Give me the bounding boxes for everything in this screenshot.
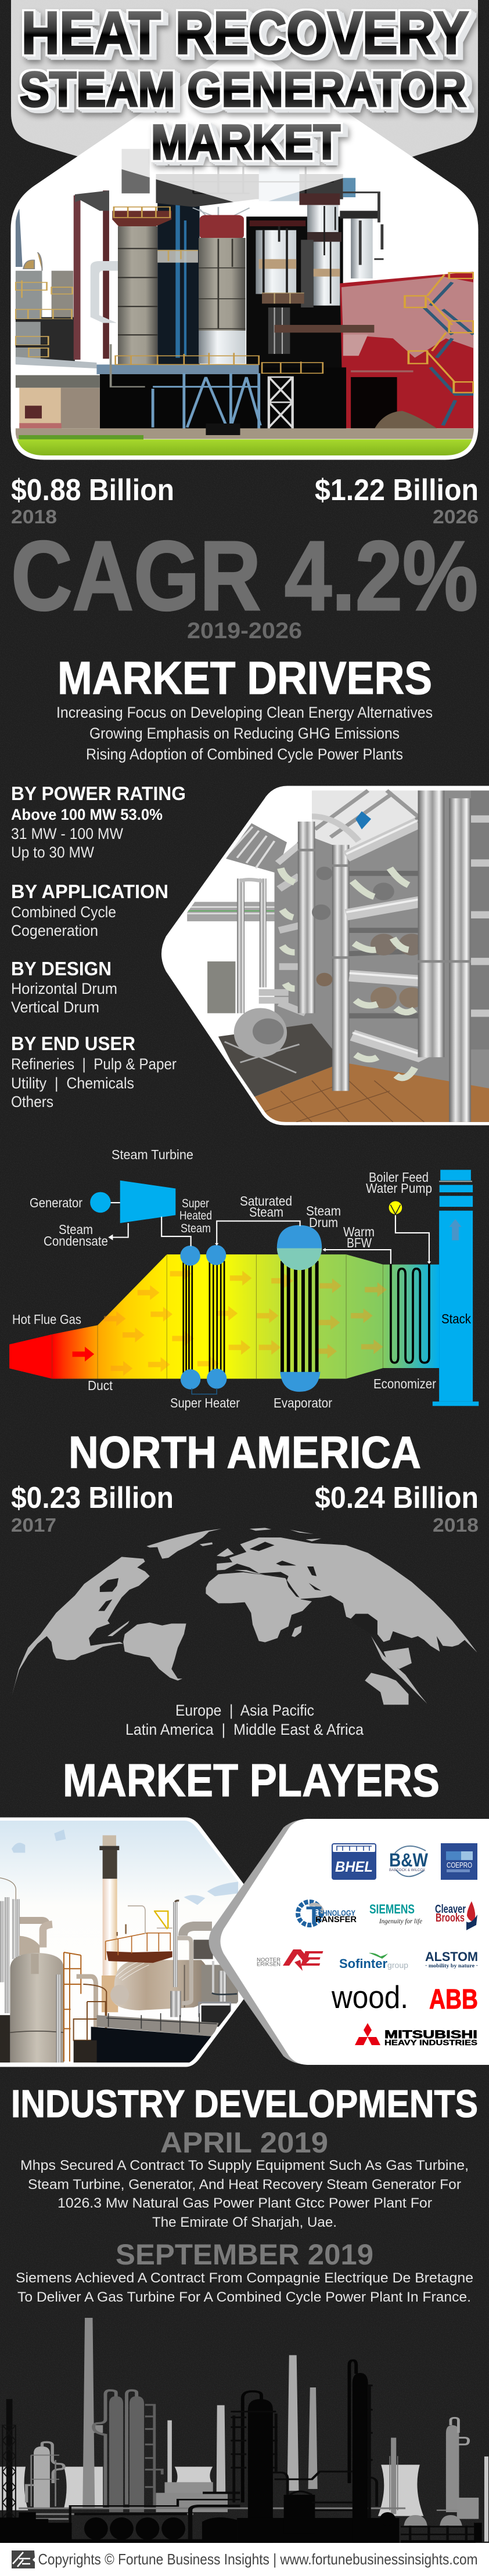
photo: power plant in hexagonal frame <box>13 45 476 458</box>
heading: market players: MARKET PLAYERS <box>63 1754 440 1806</box>
diagram labels: Saturated <box>240 1193 292 1209</box>
diagram labels: Condensate <box>44 1233 108 1249</box>
diagram: heat recovery steam generator <box>9 1147 479 1410</box>
diagram labels: Hot Flue Gas <box>12 1312 81 1327</box>
diagram labels: Warm <box>343 1224 375 1239</box>
boiler feed water pump <box>389 1201 402 1214</box>
logo: Babcock & Wilcox: B&W <box>389 1850 429 1871</box>
logo: COEPRO: COEPRO <box>447 1861 472 1869</box>
logo: BHEL: BHEL <box>335 1859 373 1875</box>
segment: by power rating: Up to 30 MW <box>11 844 94 861</box>
diagram labels: Steam Turbine <box>112 1147 193 1162</box>
heading: market drivers: MARKET DRIVERS <box>57 652 432 704</box>
logo: Technology Transfer: RANSFER <box>315 1915 357 1924</box>
icon: Fortune Business Insights logo <box>12 2550 35 2568</box>
segment: by design: Vertical Drum <box>11 998 99 1016</box>
development: September 2019: SEPTEMBER 2019 <box>116 2238 373 2271</box>
development: April 2019: APRIL 2019 <box>160 2126 328 2159</box>
market drivers list: Growing Emphasis on Reducing GHG Emissions <box>89 725 400 742</box>
diagram labels: Steam <box>181 1222 211 1235</box>
logo: Siemens: Ingenuity for life <box>379 1917 423 1925</box>
logo: Sofinter group: Sofinter <box>339 1956 387 1971</box>
stat: north america 2018: $0.24 Billion <box>315 1481 479 1515</box>
heading: north america: NORTH AMERICA <box>69 1427 421 1478</box>
logo: Babcock & Wilcox <box>389 1846 429 1876</box>
segment: by power rating: 31 MW - 100 MW <box>11 825 123 842</box>
logo: Technology Transfer: T <box>306 1901 322 1930</box>
logo: Mitsubishi Heavy Industries: HEAVY INDUSTRIES <box>384 2038 477 2047</box>
right pipework <box>173 1902 178 1987</box>
horizontal tank <box>112 1960 211 2010</box>
diagram labels: Steam <box>59 1222 93 1237</box>
stat: CAGR: 2019-2026 <box>187 618 302 643</box>
deck and lower structure <box>97 2015 219 2036</box>
segment: by design: BY DESIGN <box>11 958 112 979</box>
market drivers list <box>56 704 433 763</box>
other regions list: Europe | Asia Pacific <box>175 1702 314 1719</box>
stat: 2018 market value <box>11 473 174 527</box>
diagram labels: Steam <box>249 1204 283 1220</box>
stat: north america 2017 <box>11 1481 174 1536</box>
logo: Technology Transfer <box>298 1901 357 1930</box>
stat: 2018 market value: 2018 <box>11 506 57 527</box>
diagram labels: Evaporator <box>274 1395 332 1410</box>
segment: by end user: Others <box>11 1093 53 1110</box>
logo: Sofinter group: group <box>387 1960 408 1970</box>
diagram labels: Drum <box>309 1215 338 1230</box>
diagram labels: Stack <box>441 1311 471 1326</box>
logo: Siemens <box>369 1902 423 1925</box>
logo: Nooter Eriksen: ERIKSEN <box>257 1961 281 1968</box>
logo: Mitsubishi Heavy Industries: MITSUBISHI <box>384 2029 477 2041</box>
development: April 2019: The Emirate Of Sharjah, Uae. <box>152 2215 337 2230</box>
market drivers list: Rising Adoption of Combined Cycle Power Plants <box>86 746 403 763</box>
segment: by power rating: BY POWER RATING <box>11 783 186 804</box>
logo: Alstom: ALSTOM <box>425 1949 478 1964</box>
photo: refinery in frame <box>0 1819 285 2067</box>
platform <box>106 1951 172 1963</box>
left pipes <box>0 1878 16 1901</box>
diagram labels: Generator <box>30 1195 82 1210</box>
logo: Technology Transfer: ECHNOLOGY <box>314 1908 356 1917</box>
diagram labels: Duct <box>88 1378 113 1393</box>
logo: Alstom: · mobility by nature · <box>425 1963 478 1969</box>
segment: by application: Combined Cycle <box>11 903 116 921</box>
vertical tank <box>10 1953 64 2063</box>
globe map <box>12 1528 477 1705</box>
logo: Wood: wood. <box>331 1979 408 2015</box>
evaporator tubes <box>282 1261 317 1373</box>
footer <box>0 2543 489 2576</box>
development: April 2019: 1026.3 Mw Natural Gas Power Plant Gtcc Power Plant For <box>57 2195 432 2211</box>
stat: 2026 market value: 2026 <box>433 506 479 527</box>
diagram labels: Super Heater <box>170 1395 240 1410</box>
diagram labels: BFW <box>347 1235 372 1250</box>
segment: by power rating: Above 100 MW 53.0% <box>11 806 163 823</box>
logo: Nooter Eriksen <box>257 1947 323 1971</box>
other regions list <box>125 1702 364 1738</box>
diagram labels: Water Pump <box>366 1181 432 1196</box>
segment: by design <box>11 958 117 1016</box>
drums and headers <box>180 1245 320 1392</box>
stat: 2026 market value: $1.22 Billion <box>315 473 479 507</box>
other regions list: Latin America | Middle East & Africa <box>125 1721 364 1738</box>
diagram labels: Steam <box>306 1203 341 1218</box>
title <box>20 0 469 169</box>
stack <box>433 1170 479 1406</box>
diagram labels <box>12 1147 471 1410</box>
market drivers list: Increasing Focus on Developing Clean Energy Alternatives <box>56 704 433 721</box>
logo: Nooter Eriksen: NOOTER <box>257 1957 281 1963</box>
logo: BHEL <box>332 1843 376 1880</box>
logo: Cleaver Brooks <box>435 1901 477 1930</box>
stat: north america 2017: $0.23 Billion <box>11 1481 174 1515</box>
segment: by application: Cogeneration <box>11 922 98 939</box>
stat: 2018 market value: $0.88 Billion <box>11 473 174 507</box>
skyline illustration <box>0 2318 488 2543</box>
development: September 2019 <box>16 2238 473 2305</box>
logo: Cleaver Brooks: Brooks <box>436 1912 465 1924</box>
development: April 2019 <box>20 2126 469 2230</box>
panel: company logos <box>209 1819 489 2065</box>
diagram labels: Boiler Feed <box>369 1170 429 1185</box>
economizer coil <box>391 1262 429 1363</box>
development: September 2019: To Deliver A Gas Turbine For A Combined Cycle Power Plant In France. <box>17 2289 471 2305</box>
segment: by application <box>11 881 168 939</box>
segment: by end user: BY END USER <box>11 1033 135 1054</box>
segment: by end user <box>11 1033 177 1110</box>
segment: by power rating <box>11 783 186 861</box>
logo: ABB: ABB <box>429 1984 478 2015</box>
photo: stainless pipework in hexagonal frame <box>163 787 489 1124</box>
header panel <box>11 0 478 205</box>
development: September 2019: Siemens Achieved A Contract From Compagnie Electrique De Bretagne <box>16 2270 473 2286</box>
diagram labels: Super <box>182 1197 209 1210</box>
segment: by application: BY APPLICATION <box>11 881 168 902</box>
segment: by design: Horizontal Drum <box>11 980 117 997</box>
chimney <box>103 1835 116 1847</box>
segment: by end user: Refineries | Pulp & Paper <box>11 1055 177 1073</box>
diagram labels: Economizer <box>373 1376 436 1391</box>
logo: Sofinter group <box>339 1953 408 1971</box>
turbine and generator <box>120 1181 175 1223</box>
logo: Babcock & Wilcox: BABCOCK & WILCOX <box>389 1869 425 1872</box>
logo: Nooter Eriksen: E <box>300 1947 323 1970</box>
title: MARKET <box>151 115 340 169</box>
duct body <box>9 1170 479 1406</box>
development: April 2019: Steam Turbine, Generator, And Heat Recovery Steam Generator For <box>28 2177 461 2193</box>
diagram labels: Heated <box>179 1209 212 1222</box>
logo: Mitsubishi Heavy Industries <box>355 2023 477 2047</box>
logo: COEPRO <box>441 1843 477 1880</box>
development: April 2019: Mhps Secured A Contract To Supply Equipment Such As Gas Turbine, <box>20 2158 469 2173</box>
stat: north america 2017: 2017 <box>11 1514 56 1536</box>
segment: by end user: Utility | Chemicals <box>11 1074 134 1092</box>
ladder <box>64 1952 81 2061</box>
stat: north america 2018 <box>315 1481 479 1536</box>
steam and water lines <box>110 1203 429 1264</box>
logo: Cleaver Brooks: Cleaver <box>435 1903 466 1916</box>
logo: Siemens: SIEMENS <box>369 1902 415 1916</box>
super heater tubes <box>184 1261 224 1373</box>
stat: north america 2018: 2018 <box>433 1514 479 1536</box>
stat: 2026 market value <box>315 473 479 527</box>
